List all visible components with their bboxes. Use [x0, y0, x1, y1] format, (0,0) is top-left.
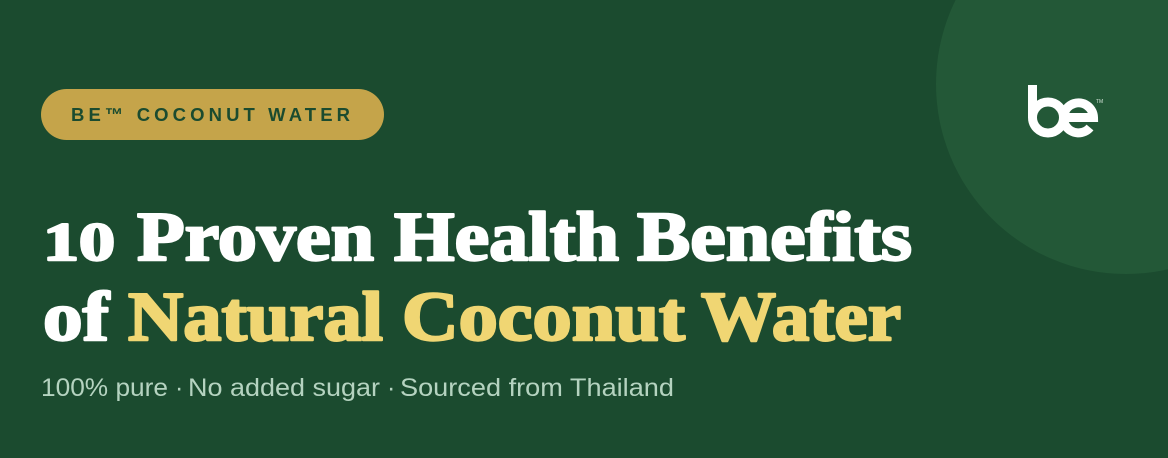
subtitle: Sourced from Thailand — [400, 374, 674, 402]
subtitle: 100% pure — [41, 374, 168, 402]
icon: be logo: TM — [1096, 99, 1103, 105]
title: of — [43, 279, 110, 356]
subtitle: No added sugar — [188, 374, 380, 402]
title — [43, 199, 912, 356]
subtitle: · — [387, 374, 395, 402]
title: Water — [701, 279, 901, 356]
title: Coconut — [402, 279, 685, 356]
subtitle: · — [175, 374, 183, 402]
badge: BE™ COCONUT WATER — [71, 104, 350, 125]
badge — [41, 89, 384, 140]
title: Natural — [128, 279, 383, 356]
icon: be logo — [1032, 85, 1103, 133]
title: Benefits — [637, 199, 912, 276]
subtitle — [41, 374, 674, 402]
title: Proven — [137, 199, 374, 276]
title: Health — [394, 199, 619, 276]
decorative circle — [936, 0, 1168, 274]
title: 10 — [43, 212, 115, 272]
